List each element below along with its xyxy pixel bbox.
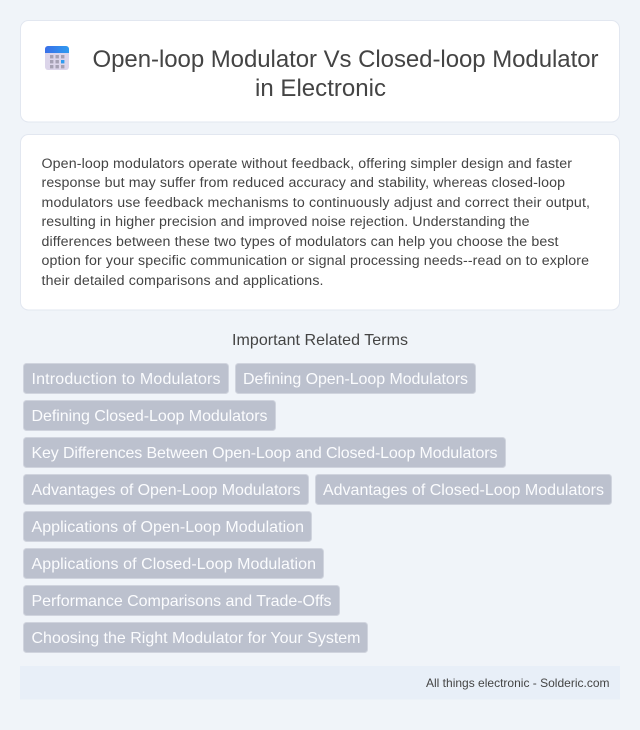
tag: defining closed-loop xyxy=(24,400,276,430)
tag: introduction xyxy=(24,364,228,394)
footer bar xyxy=(20,666,620,700)
tag: performance comparisons xyxy=(24,586,340,616)
intro paragraph: differences between these two types of modulators can help you choose the best xyxy=(42,234,559,250)
panel: intro text xyxy=(20,134,620,310)
title: in Electronic xyxy=(255,75,386,102)
intro paragraph: modulators use feedback mechanisms to continuously adjust and correct their output, xyxy=(42,195,590,211)
tag: applications closed-loop xyxy=(24,548,324,578)
title: Open-loop Modulator Vs Closed-loop Modulator xyxy=(92,46,598,73)
intro paragraph: resulting in higher precision and improved noise rejection. Understanding the xyxy=(42,214,530,230)
tag: advantages closed-loop: Advantages of Closed-Loop Modulators xyxy=(323,482,604,499)
tag: key differences: Key Differences Between Open-Loop and Closed-Loop Modulators xyxy=(32,445,498,462)
tag: performance comparisons: Performance Comparisons and Trade-Offs xyxy=(32,593,332,610)
tag: applications open-loop: Applications of Open-Loop Modulation xyxy=(32,519,304,536)
intro paragraph: response but may suffer from reduced accuracy and stability, whereas closed-loop xyxy=(42,175,565,191)
title xyxy=(92,46,598,102)
tag: advantages open-loop xyxy=(24,474,308,504)
tag: choosing the right modulator xyxy=(24,622,368,652)
footer credit: All things electronic - Solderic.com xyxy=(426,676,610,690)
panel: title header xyxy=(20,20,620,122)
tag: choosing the right modulator: Choosing the Right Modulator for Your System xyxy=(32,630,360,647)
tag list xyxy=(24,364,612,652)
intro paragraph: Open-loop modulators operate without feedback, offering simpler design and faster xyxy=(42,156,572,172)
tag: key differences xyxy=(24,438,506,468)
intro paragraph: their detailed comparisons and applications. xyxy=(42,273,324,289)
intro paragraph: option for your specific communication or signal processing needs--read on to explore xyxy=(42,253,589,269)
tag: advantages closed-loop xyxy=(316,474,612,504)
icon: calendar xyxy=(45,46,69,70)
intro paragraph xyxy=(42,156,590,289)
tag: defining closed-loop: Defining Closed-Loop Modulators xyxy=(32,408,268,425)
tag: introduction: Introduction to Modulators xyxy=(32,371,220,388)
heading: related terms: Important Related Terms xyxy=(232,332,408,349)
tag: applications closed-loop: Applications of Closed-Loop Modulation xyxy=(32,556,316,573)
tag: defining open-loop: Defining Open-Loop Modulators xyxy=(243,371,468,388)
tag: applications open-loop xyxy=(24,512,312,542)
tag: advantages open-loop: Advantages of Open-Loop Modulators xyxy=(32,482,300,499)
tag: defining open-loop xyxy=(236,364,476,394)
